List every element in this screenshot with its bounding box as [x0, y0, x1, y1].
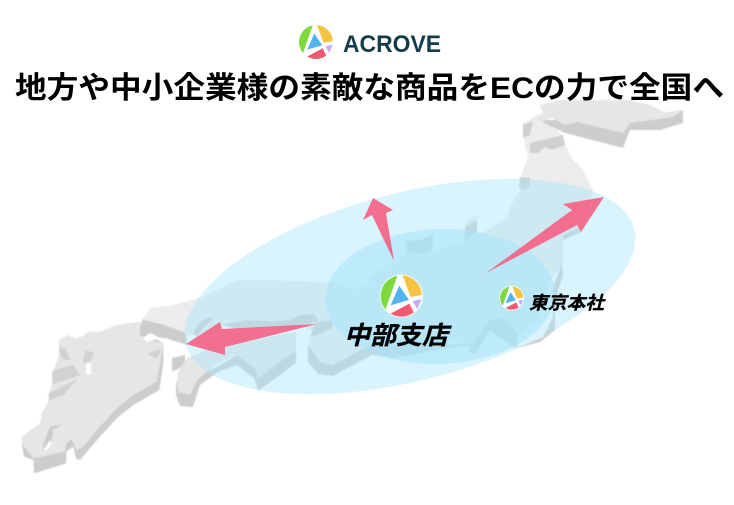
Shikoku	[172, 332, 296, 407]
label: Chubu branch: 中部支店	[344, 322, 452, 350]
arrow: to the north	[363, 198, 394, 261]
icon: Tokyo head office logo	[499, 286, 524, 310]
Kyushu	[22, 322, 163, 473]
arrow: to the west	[186, 322, 317, 355]
logo wordmark: ACROVE	[343, 31, 441, 58]
icon: Chubu branch logo	[380, 274, 423, 318]
title: 地方や中小企業様の素敵な商品をECの力で全国へ	[15, 72, 724, 105]
wide coverage ellipse	[162, 138, 658, 435]
Hokkaido	[538, 100, 683, 148]
label: Tokyo head office: 東京本社	[529, 293, 606, 313]
map of Japan	[22, 100, 683, 473]
Honshu	[140, 113, 593, 376]
Noto peninsula and Sado island	[406, 214, 477, 254]
inner coverage ellipse	[323, 225, 557, 368]
arrow: to the north-east	[486, 197, 604, 273]
icon: ACROVE logo mark	[298, 24, 334, 60]
